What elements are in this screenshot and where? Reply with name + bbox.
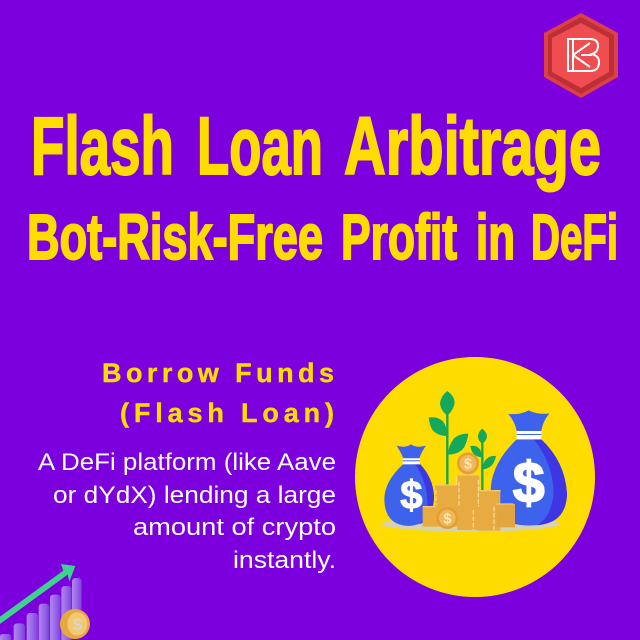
arrow: [0, 564, 75, 624]
coins: $: [443, 511, 451, 527]
coins: [423, 452, 515, 531]
icon: money bags and coins: [381, 391, 567, 532]
coins: $: [464, 457, 472, 473]
text block: description: A DeFi platform (like Aave: [38, 449, 336, 476]
large bag: $: [513, 451, 545, 515]
text block: description: or dYdX) lending a large: [53, 482, 336, 509]
text block: description: instantly.: [233, 547, 336, 574]
chart: rising bars with arrow and coin: [0, 564, 90, 640]
heading: borrow funds: [102, 358, 334, 428]
icon: hexagon logo: [544, 13, 618, 98]
title: Profit: [341, 201, 457, 273]
heading: borrow funds: (Flash Loan): [120, 398, 334, 428]
text block: description: amount of crypto: [133, 514, 336, 541]
title: Bot-Risk-Free: [27, 201, 323, 273]
coin: $: [73, 615, 83, 634]
heading: borrow funds: Borrow Funds: [102, 358, 334, 388]
title: Flash: [31, 101, 174, 192]
text block: description: [38, 449, 336, 574]
small bag: $: [400, 474, 422, 518]
title: in: [476, 201, 515, 273]
plants: [429, 391, 496, 492]
shadow ellipse: [381, 516, 560, 532]
small bag: [384, 444, 434, 526]
panel: yellow circle: [355, 357, 595, 597]
title: Loan: [197, 101, 323, 192]
title: [27, 101, 618, 273]
bars: [0, 578, 82, 640]
large bag: [491, 410, 567, 526]
